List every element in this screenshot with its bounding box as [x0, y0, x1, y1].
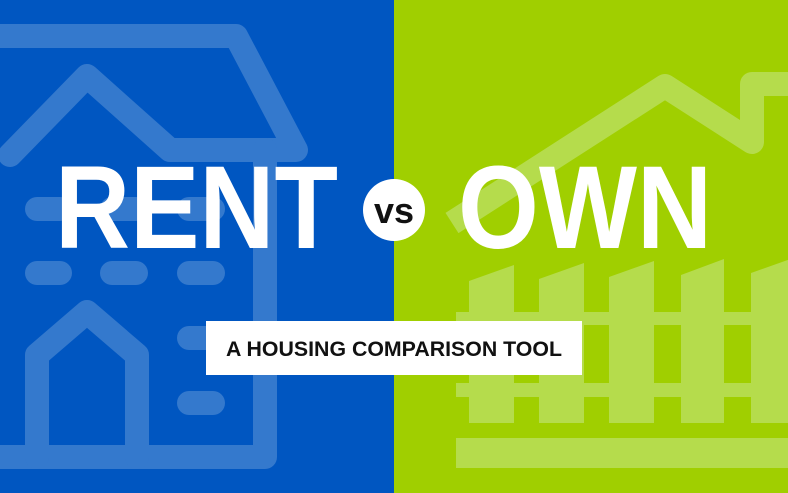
title: RENT: RENT	[55, 142, 338, 274]
panel: rent (blue)	[0, 0, 394, 493]
badge: vs: vs	[374, 190, 414, 231]
panel: own (green)	[394, 0, 788, 493]
badge: vs	[363, 179, 425, 241]
icon: house roof with chimney	[452, 84, 788, 223]
title: OWN: OWN	[458, 142, 712, 274]
subtitle box	[206, 321, 582, 375]
icon: apartment house outline	[0, 36, 296, 457]
icon: picket fence	[456, 257, 788, 468]
subtitle box: A HOUSING COMPARISON TOOL	[226, 338, 562, 361]
